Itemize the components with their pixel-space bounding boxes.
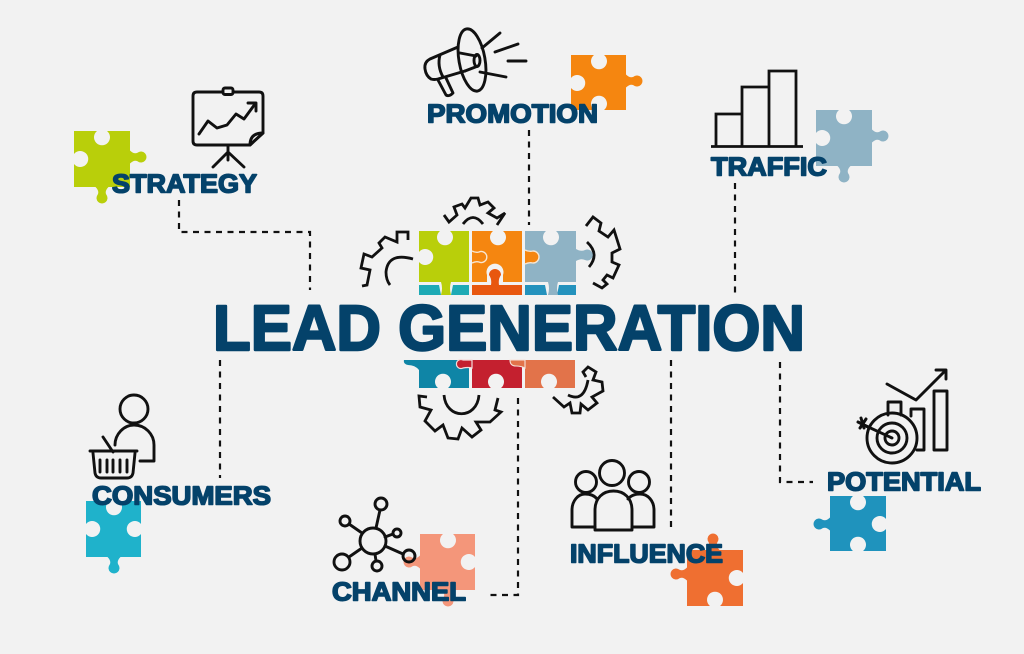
label: potential: POTENTIAL	[827, 466, 981, 496]
puzzle piece: channel	[403, 534, 475, 607]
central puzzle and gears	[361, 198, 620, 439]
icon: network nodes	[334, 498, 415, 571]
puzzle piece: terracotta	[510, 360, 575, 388]
panel: influence	[570, 360, 743, 606]
puzzle piece: promotion	[571, 55, 643, 110]
connector: influence	[670, 360, 672, 530]
connector: traffic	[734, 183, 736, 293]
gear: right	[586, 217, 620, 288]
connector: consumers	[219, 360, 221, 478]
puzzle piece: traffic	[816, 110, 889, 183]
label: influence: INFLUENCE	[570, 538, 723, 568]
puzzle piece: green	[419, 231, 469, 295]
label: strategy: STRATEGY	[112, 168, 257, 198]
title: LEAD GENERATION	[213, 292, 805, 364]
puzzle piece: teal	[404, 360, 469, 388]
connector: channel	[485, 398, 518, 595]
label: traffic: TRAFFIC	[711, 152, 827, 182]
puzzle piece: influence	[670, 533, 743, 606]
gear: bottom left	[419, 395, 501, 439]
puzzle piece: grey blue	[525, 231, 593, 295]
gear: bottom right	[553, 367, 603, 413]
panel: traffic	[711, 71, 889, 293]
puzzle piece: red	[456, 360, 522, 388]
puzzle piece: consumers	[86, 501, 141, 574]
puzzle piece: orange	[472, 231, 522, 282]
panel: consumers	[86, 360, 271, 574]
icon: bar chart	[711, 71, 803, 146]
puzzle strips under top row	[419, 269, 576, 295]
connector: potential	[780, 362, 813, 482]
panel: strategy	[74, 88, 310, 290]
icon: group of people	[572, 460, 654, 530]
connector: promotion	[528, 130, 530, 225]
icon: presentation board	[193, 88, 263, 167]
icon: shopper with basket	[90, 395, 154, 478]
panel: promotion	[425, 27, 643, 225]
label: channel: CHANNEL	[332, 576, 466, 606]
puzzle piece: strategy	[74, 131, 147, 204]
icon: megaphone	[425, 27, 526, 96]
panel: channel	[332, 398, 518, 607]
puzzle piece: potential	[813, 496, 886, 551]
panel: potential	[780, 362, 981, 551]
label: promotion: PROMOTION	[427, 98, 598, 128]
connector: strategy	[179, 200, 310, 290]
gear: top	[444, 198, 505, 225]
gear: left	[361, 232, 413, 286]
label: consumers: CONSUMERS	[92, 480, 271, 510]
icon: target and growth chart	[858, 370, 947, 463]
